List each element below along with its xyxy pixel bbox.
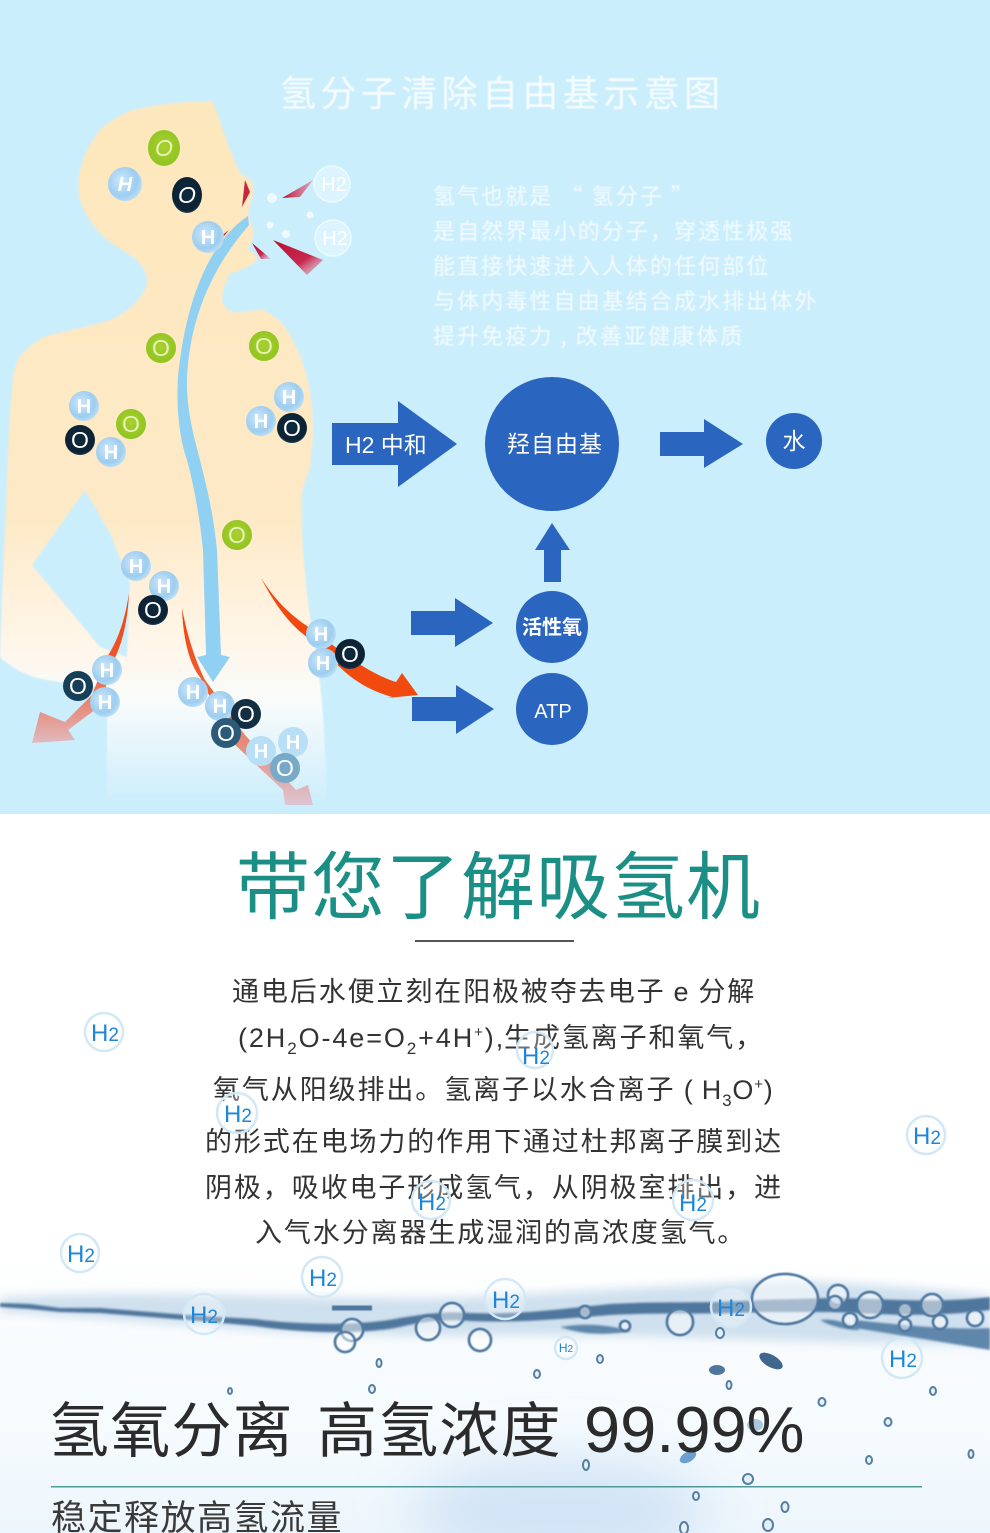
node: active oxygen: 活性氧 — [522, 611, 582, 640]
molecules: hydrogen: H — [201, 227, 215, 249]
molecules: hydrogen: H — [254, 411, 268, 433]
divider line — [51, 1486, 922, 1488]
molecules: hydrogen: H — [77, 396, 91, 418]
molecules: hydrogen: H — [129, 556, 143, 578]
molecules: hydrogen: H — [316, 653, 330, 675]
water droplets — [228, 1328, 974, 1533]
headline: purity: 高氢浓度 — [317, 1383, 562, 1470]
intro text: 氢气也就是 “ 氢分子 ” — [433, 179, 695, 211]
body text: ), — [485, 1023, 505, 1053]
floating H2 bubbles: H2 — [91, 1020, 119, 1047]
molecules: oxygen green: O — [255, 333, 273, 359]
floating H2 bubbles: H2 — [224, 1101, 252, 1128]
molecules: hydrogen: H — [213, 696, 227, 718]
body text: 阴极，吸收电子形成氢气，从阴极室排出，进 — [205, 1166, 783, 1205]
headline: purity: 99.99% — [584, 1393, 804, 1466]
water bubbles — [332, 1274, 983, 1352]
body text: 氧气从阳级排出。氢离子以水合离子 ( H — [213, 1068, 722, 1107]
floating H2 bubbles: H2 — [679, 1190, 707, 1217]
heading underline — [415, 940, 574, 942]
floating H2 bubbles: H2 — [913, 1123, 941, 1150]
molecules: dark oxygen: O — [217, 720, 235, 746]
body text: + — [474, 1024, 485, 1041]
arrow: to ATP — [412, 685, 494, 734]
body text: 3 — [722, 1091, 732, 1110]
molecules: oxygen green: O — [152, 335, 170, 361]
molecules: hydrogen: H — [282, 387, 296, 409]
molecules: hydrogen: H — [157, 576, 171, 598]
arrow: H2 neutralise: H2 中和 — [345, 426, 427, 460]
molecules: hydrogen: H — [100, 660, 114, 682]
body text: 生成氢离子和氧气， — [504, 1016, 764, 1055]
floating H2 bubbles: H2 — [309, 1265, 337, 1292]
molecules: oxygen green: O — [155, 135, 173, 161]
body text: +4H — [418, 1023, 474, 1053]
molecules: dark oxygen: O — [69, 673, 87, 699]
intro text: 是自然界最小的分子，穿透性极强 — [433, 214, 795, 246]
body text: O-4e=O — [299, 1023, 407, 1053]
molecules: hydrogen: H — [314, 624, 328, 646]
node: ATP — [516, 673, 588, 745]
node: active oxygen — [516, 591, 588, 663]
body text: ) — [764, 1075, 773, 1105]
arrow: to active oxygen — [411, 598, 493, 647]
title: 氢分子清除自由基示意图 — [280, 65, 724, 117]
orange arrow: middle — [182, 608, 313, 805]
floating H2 bubbles: H2 — [889, 1346, 917, 1373]
arrow: up to hydroxyl — [535, 523, 570, 582]
floating H2 bubbles: H2 — [717, 1295, 745, 1322]
water surface line — [0, 1297, 990, 1332]
molecules: dark oxygen: O — [341, 641, 359, 667]
molecules: dark oxygen: O — [283, 415, 301, 441]
intro text: 提升免疫力 , 改善亚健康体质 — [433, 319, 744, 351]
panel: water background — [0, 814, 990, 1533]
molecules: dark oxygen: O — [178, 182, 196, 208]
water lower ripple — [560, 1320, 990, 1350]
panel: hydrogen diagram — [0, 0, 990, 814]
molecules: dark oxygen: O — [71, 427, 89, 453]
floating H2 bubbles: H2 — [190, 1302, 218, 1329]
body text — [205, 970, 783, 1250]
floating H2 bubbles: H2 — [492, 1287, 520, 1314]
node: ATP: ATP — [534, 701, 572, 723]
body text: 2 — [407, 1039, 418, 1058]
inhaled H2 bubbles: H2 — [322, 228, 348, 250]
molecules: hydrogen: H — [186, 682, 200, 704]
molecules: hydrogen — [69, 167, 338, 766]
intro text: 与体内毒性自由基结合成水排出体外 — [433, 284, 819, 316]
inhaled hydrogen arrows at mouth — [207, 180, 323, 275]
body text: (2H — [238, 1023, 287, 1053]
inhaled H2 bubbles: H2 — [321, 174, 347, 196]
molecules: hydrogen: H — [104, 442, 118, 464]
floating H2 bubbles: H2 — [522, 1043, 550, 1070]
human body silhouette — [0, 101, 327, 800]
headline: purity: 氢氧分离 — [49, 1383, 294, 1470]
floating H2 bubbles — [61, 1013, 945, 1378]
intro text: 能直接快速进入人体的任何部位 — [433, 249, 770, 281]
body text: 的形式在电场力的作用下通过杜邦离子膜到达 — [205, 1120, 783, 1159]
molecules: dark oxygen — [63, 177, 365, 783]
inhaled H2 bubbles — [266, 166, 351, 256]
body text: O — [732, 1075, 754, 1105]
node: hydroxyl radical: 羟自由基 — [507, 425, 603, 459]
molecules: hydrogen: H — [286, 732, 300, 754]
floating H2 bubbles: H2 — [559, 1341, 574, 1355]
molecules: oxygen green: O — [228, 522, 246, 548]
body text: 通电后水便立刻在阳极被夺去电子 e 分解 — [232, 970, 756, 1009]
arrow: to water — [660, 419, 743, 468]
molecules: oxygen green: O — [122, 411, 140, 437]
orange arrow: right — [261, 578, 418, 698]
molecules: dark oxygen: O — [237, 701, 255, 727]
molecules: dark oxygen: O — [276, 755, 294, 781]
molecules: hydrogen: H — [254, 741, 268, 763]
node: water: 水 — [782, 422, 806, 456]
body text: 2 — [287, 1039, 299, 1058]
airway arrow — [177, 216, 249, 682]
molecules: oxygen green — [116, 130, 279, 550]
arrow: H2 neutralise — [332, 401, 457, 487]
water glow — [0, 1280, 990, 1345]
orange arrow: left — [32, 593, 129, 743]
node: water — [766, 413, 822, 469]
node: hydroxyl radical — [485, 377, 619, 511]
intro text — [433, 179, 819, 351]
body text: + — [754, 1076, 764, 1093]
heading: 带您了解吸氢机 — [236, 828, 761, 935]
body text: 入气水分离器生成湿润的高浓度氢气。 — [255, 1211, 746, 1250]
molecules: hydrogen: H — [98, 692, 112, 714]
floating H2 bubbles: H2 — [67, 1241, 95, 1268]
floating H2 bubbles: H2 — [418, 1189, 446, 1216]
molecules: hydrogen: H — [118, 174, 133, 196]
molecules: dark oxygen: O — [144, 597, 162, 623]
